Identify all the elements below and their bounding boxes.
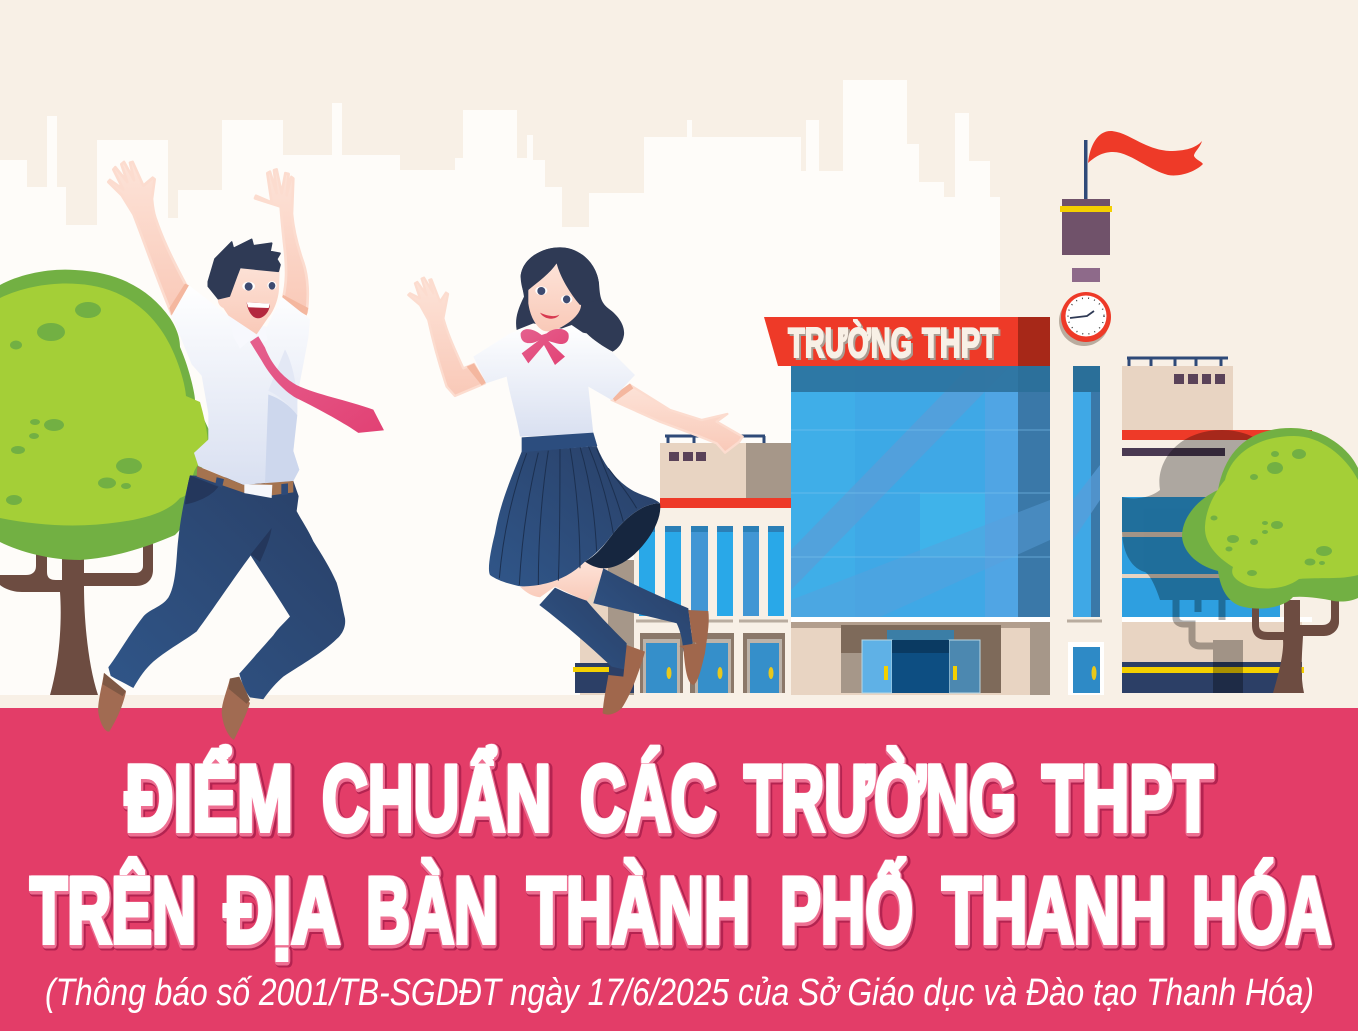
sign text: THPT: [922, 319, 998, 366]
flag: [1084, 131, 1203, 199]
left arm: [108, 162, 189, 316]
title line 1: CÁC: [582, 748, 718, 853]
sign text: TRƯỜNG: [790, 320, 914, 368]
title line 2: ĐỊA: [225, 859, 340, 964]
title line 2: TRÊN: [31, 859, 196, 964]
title line 2: BÀN: [366, 858, 498, 962]
title line 1: CHUẨN: [323, 746, 551, 852]
skirt waistband: [522, 433, 597, 452]
title line 2: PHỐ: [780, 858, 913, 962]
title line 1: TRƯỜNG: [746, 748, 1018, 853]
eyes: [242, 281, 277, 291]
shoes: [98, 673, 250, 740]
title line 2: ĐỊA: [226, 860, 342, 965]
shirt: [172, 285, 310, 485]
main title: [30, 744, 1333, 965]
title line 2: THANH: [942, 858, 1166, 962]
title line 2: TRÊN: [30, 858, 196, 962]
right arm: [612, 383, 743, 453]
title line 1: THPT: [1042, 746, 1213, 850]
clock tower: [1050, 131, 1203, 695]
title line 2: BÀN: [367, 859, 498, 964]
shirt: [473, 325, 635, 437]
girl student: [408, 247, 743, 715]
bow tie: [521, 329, 569, 365]
left arm: [408, 278, 486, 396]
hair: [208, 240, 280, 299]
ground strip: [0, 695, 1358, 709]
city skyline: [0, 80, 1050, 696]
right school wing: [1122, 358, 1312, 693]
girl eyes: [535, 286, 572, 304]
shirt shade: [265, 349, 299, 484]
neck and face: [218, 263, 280, 334]
title line 1: THPT: [1044, 748, 1215, 853]
foliage light: [0, 284, 208, 525]
foliage dark: [0, 270, 209, 560]
trunk: [1252, 600, 1339, 693]
trousers: [108, 475, 345, 699]
title line 2: TRÊN: [32, 860, 198, 965]
girl mouth: [540, 313, 559, 319]
title line 2: THÀNH: [527, 858, 750, 962]
left school wing: [573, 436, 791, 695]
title line 2: THÀNH: [529, 860, 752, 965]
title line 2: PHỐ: [781, 859, 913, 964]
foliage light: [1205, 436, 1358, 588]
title line 2: PHỐ: [782, 860, 915, 965]
title line 2: ĐỊA: [224, 858, 340, 962]
right arm: [255, 170, 308, 316]
sign text: THPT: [924, 321, 1000, 368]
right tree: [1182, 428, 1358, 693]
title line 1: CÁC: [580, 746, 716, 850]
socks: [539, 568, 693, 670]
title line 1: THPT: [1043, 747, 1213, 852]
skirt pleats: [499, 446, 637, 585]
tie: [250, 336, 384, 433]
foliage dark: [1182, 428, 1358, 609]
skirt: [489, 446, 660, 586]
mouth: [247, 302, 270, 318]
clock: [1059, 292, 1111, 346]
tree shadow: [1122, 430, 1285, 693]
main school building: [791, 366, 1050, 695]
title line 1: CÁC: [581, 747, 716, 852]
spots: [6, 302, 142, 505]
title line 1: CHUẨN: [324, 747, 553, 853]
title line 1: TRƯỜNG: [745, 747, 1016, 852]
belt: [197, 466, 293, 498]
collar: [228, 316, 268, 349]
left tree: [0, 270, 209, 695]
school sign: [764, 317, 1050, 368]
title line 1: ĐIỂM: [126, 747, 293, 852]
title line 1: ĐIỂM: [125, 746, 293, 850]
front hair: [521, 247, 599, 305]
title line 2: THANH: [943, 859, 1166, 964]
boy student: [98, 162, 384, 740]
shoes: [603, 610, 709, 715]
trouser fold: [251, 528, 272, 562]
spots: [1210, 449, 1332, 576]
back hair: [516, 247, 624, 352]
title line 1: ĐIỂM: [127, 748, 295, 853]
title line 1: [125, 744, 1215, 853]
title line 2: BÀN: [368, 860, 500, 965]
title line 1: CHUẨN: [322, 744, 551, 850]
pink title band: [0, 708, 1358, 1031]
title line 2: THÀNH: [528, 859, 750, 964]
title line 2: [30, 858, 1333, 965]
trunk: [0, 540, 153, 695]
sign text: TRƯỜNG: [788, 318, 912, 366]
title line 1: TRƯỜNG: [744, 746, 1016, 850]
trouser pocket: [185, 475, 218, 504]
title line 2: THANH: [944, 860, 1168, 965]
face: [528, 263, 581, 331]
thighs: [520, 562, 607, 602]
skirt lining: [585, 503, 660, 568]
